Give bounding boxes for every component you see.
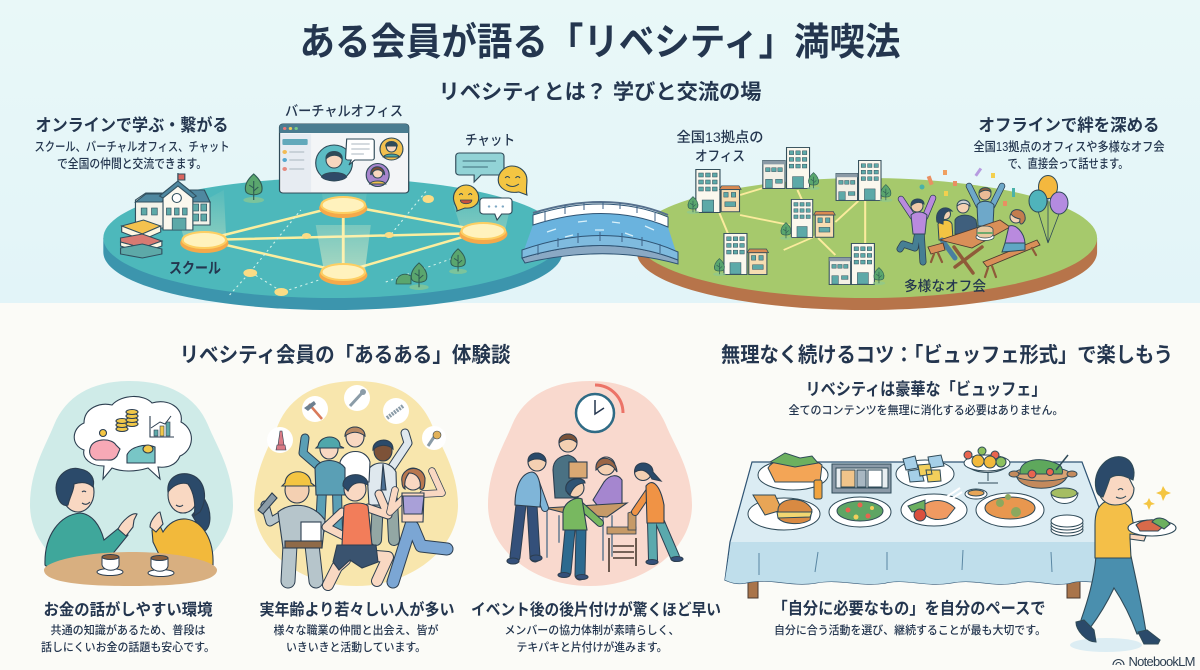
woman flexing: [390, 468, 447, 582]
watermark: NotebookLM: NotebookLM: [1128, 654, 1196, 669]
text: chat label: チャット: [465, 132, 515, 148]
icon: school with books: [121, 173, 210, 258]
trees: [243, 174, 467, 290]
woman at right: [1002, 210, 1025, 252]
piggy bank: [90, 440, 120, 460]
panel: quick cleanup: [488, 381, 692, 586]
person jumping: [900, 198, 933, 262]
purple person: [593, 457, 622, 505]
text block: money talk: 話しにくいお金の話題も安心です。: [41, 640, 215, 654]
text block: own pace: 自分に合う活動を選び、継続することが最も大切です。: [774, 623, 1046, 637]
text block: online: オンラインで学ぶ・繋がる: [36, 115, 228, 135]
text block: money talk: お金の話がしやすい環境: [44, 600, 212, 619]
island disc: [637, 238, 1097, 310]
text block: quick cleanup: [471, 600, 721, 654]
money pouch: [127, 445, 155, 463]
text block: buffet metaphor: 全てのコンテンツを無理に消化する必要はありません。: [788, 403, 1064, 417]
bottom background: [0, 303, 1200, 670]
stacked chairs: [607, 510, 636, 572]
connecting paths: [719, 187, 865, 255]
table legs: [748, 575, 1080, 598]
text block: online: [34, 115, 230, 171]
heading: member experiences: リベシティ会員の「あるある」体験談: [180, 344, 510, 367]
green person: [558, 479, 600, 580]
cake: [976, 226, 994, 240]
illustration: person with plate: [1070, 457, 1176, 652]
orange person: [634, 463, 683, 564]
tool speech bubbles: [267, 385, 446, 453]
text block: own pace: [772, 598, 1046, 637]
text block: money talk: 共通の知識があるため、普段は: [50, 623, 206, 637]
icon: virtual office window: [280, 124, 409, 193]
text block: quick cleanup: メンバーの協力体制が素晴らしく、: [504, 623, 680, 637]
panel: online island: [103, 124, 563, 310]
confetti: [920, 168, 1015, 206]
growth chart: [150, 416, 174, 437]
text: school label: スクール: [169, 260, 221, 277]
network lines: [204, 205, 483, 272]
tablecloth: [725, 462, 1118, 584]
panel: youthful members: [254, 381, 458, 586]
dark-skinned man in shirt: [367, 433, 408, 540]
man raising arms: [969, 186, 1002, 226]
text block: youthful members: 様々な職業の仲間と出会え、皆が: [274, 623, 439, 637]
heading: buffet tips: 無理なく続けるコツ：「ビュッフェ形式」で楽しもう: [721, 344, 1173, 367]
text block: offline: オフラインで絆を深める: [978, 116, 1160, 135]
blob background: [488, 381, 692, 586]
panel: offline island: [636, 147, 1097, 310]
woman talking: [150, 474, 213, 565]
thought bubble: [74, 396, 191, 479]
section heading: what is Livecity: リベシティとは？ 学びと交流の場: [438, 81, 762, 104]
island disc: [103, 238, 563, 310]
worker in teal: [303, 437, 345, 530]
text block: online: スクール、バーチャルオフィス、チャット: [34, 140, 230, 154]
table with coffee cups: [44, 552, 217, 586]
text block: offline: 全国13拠点のオフィスや多様なオフ会: [974, 139, 1165, 154]
woman in yellow and man in suit: [937, 200, 978, 258]
text block: youthful members: [260, 600, 454, 654]
text block: quick cleanup: テキパキと片付けが進みます。: [516, 640, 668, 654]
blob background: [30, 381, 233, 586]
text block: youthful members: 実年齢より若々しい人が多い: [260, 600, 454, 619]
text: office label: オフィス: [695, 148, 745, 164]
icon: clock: [576, 385, 623, 432]
title: ある会員が語る「リベシティ」満喫法: [300, 22, 900, 64]
table: [545, 503, 627, 560]
glowing nodes: [180, 197, 507, 285]
text block: buffet metaphor: リベシティは豪華な「ビュッフェ」: [806, 379, 1046, 399]
text block: offline: [974, 116, 1165, 171]
small glowing pads: [243, 195, 434, 296]
text: office label: 全国13拠点の: [676, 129, 764, 145]
text: virtual office label: バーチャルオフィス: [285, 103, 403, 119]
dotted paths: [230, 190, 453, 295]
back person with board: [553, 434, 587, 498]
text block: own pace: 「自分に必要なもの」を自分のペースで: [772, 598, 1046, 618]
icon: chat bubbles and emoji: [453, 153, 527, 220]
picnic table: [928, 220, 1040, 277]
icon: party at picnic table: [900, 168, 1068, 277]
gold coins: [116, 410, 138, 432]
blue person: [507, 453, 546, 564]
runner in orange tank: [326, 475, 388, 585]
light beams: [178, 190, 511, 270]
text: off-meeting label: 多様なオフ会: [904, 278, 986, 294]
text block: money talk: [41, 600, 215, 654]
text block: youthful members: いきいきと活動しています。: [286, 640, 426, 654]
dishes: [748, 447, 1083, 536]
doctor: [340, 427, 370, 482]
text block: online: で全国の仲間と交流できます。: [57, 156, 207, 171]
text block: offline: で、直接会って話せます。: [1008, 156, 1128, 171]
text block: buffet metaphor: [788, 379, 1064, 417]
text: office label: [676, 129, 764, 164]
office buildings: [687, 147, 892, 285]
man talking: [45, 468, 137, 569]
icon: bridge: [522, 202, 678, 264]
panel: money talk: [30, 381, 233, 586]
text block: quick cleanup: イベント後の後片付けが驚くほど早い: [471, 600, 721, 619]
balloons: [1029, 176, 1068, 243]
blob background: [254, 381, 458, 586]
top background band: [0, 0, 1200, 303]
video call avatars: [316, 138, 403, 186]
hard hat worker: [258, 472, 325, 581]
illustration: buffet table: [725, 447, 1118, 598]
